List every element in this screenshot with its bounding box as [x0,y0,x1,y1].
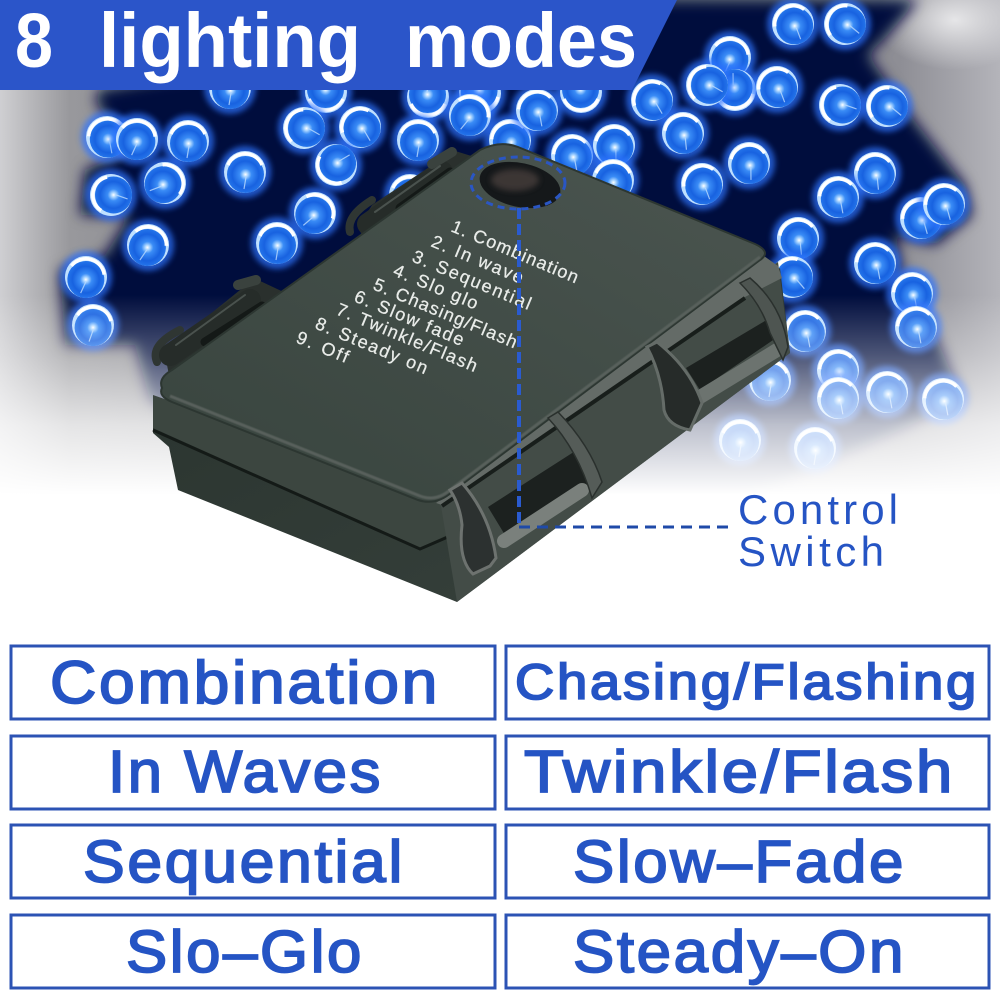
mode box: In Waves [11,736,495,809]
control switch label: Switch [738,528,884,575]
locking rod, lower [504,490,582,541]
clip 2 [647,342,702,430]
photo background: grey backdrop [0,0,1000,520]
rear hinge lower [156,280,290,380]
title banner [0,0,677,90]
dark groove under lid edge [442,298,745,506]
lid skirt [153,262,782,548]
mode box: Slow-Fade [506,825,989,898]
right side battery face [440,264,790,602]
mode box: Slo-Glo: Slo–Glo [126,919,364,985]
printed mode list [293,216,582,378]
mode box: Sequential [11,825,495,898]
battery control box [153,144,790,602]
mode box: Combination: Combination [50,649,440,716]
printed mode list: 7. Twinkle/Flash [333,299,480,376]
control switch label [738,486,898,575]
printed mode list: 8. Steady on [312,313,431,378]
mode box: Combination [11,646,495,719]
printed mode list: 9. Off [293,327,353,367]
clip 4 [450,483,496,574]
mode box: Slo-Glo [11,915,495,988]
mode box: Steady-On: Steady–On [573,919,906,985]
title banner: 8 [15,0,53,84]
title banner: lighting [99,0,361,84]
LED string lights [54,0,979,474]
box lower body [153,268,790,602]
title banner: modes [405,0,637,84]
mode box: Slow-Fade: Slow–Fade [573,829,906,895]
printed mode list: 5. Chasing/Flash [370,274,520,352]
mode box: Twinkle/Flash: Twinkle/Flash [524,739,955,805]
lid edge band [436,256,782,505]
printed mode list: 3. Sequential [409,246,534,314]
control button [475,155,565,215]
white fade over lower photo [0,295,1000,495]
printed mode list: 6. Slow fade [351,286,467,350]
recess between clips, upper [686,318,776,390]
printed mode list: 4. Slo glo [390,260,481,313]
lid top [161,144,765,502]
mode box: Sequential: Sequential [83,829,405,895]
mode box: Steady-On [506,915,989,988]
recess between clips, lower [488,448,592,535]
rear hinge upper [349,150,478,245]
background light corner [875,0,1000,70]
control switch label: Control [738,486,898,533]
mode box: Chasing/Flashing [506,646,989,719]
locking rod, upper [700,350,777,397]
mode box: Chasing/Flashing: Chasing/Flashing [515,654,979,710]
clip 1 [740,278,788,360]
printed mode list: 2. In wave [428,231,527,288]
dark navy LED string cloud [60,0,972,520]
clip 3 [548,412,602,498]
printed mode list: 1. Combination [448,216,582,287]
control switch callout line [471,157,730,527]
mode box: In Waves: In Waves [108,739,383,805]
